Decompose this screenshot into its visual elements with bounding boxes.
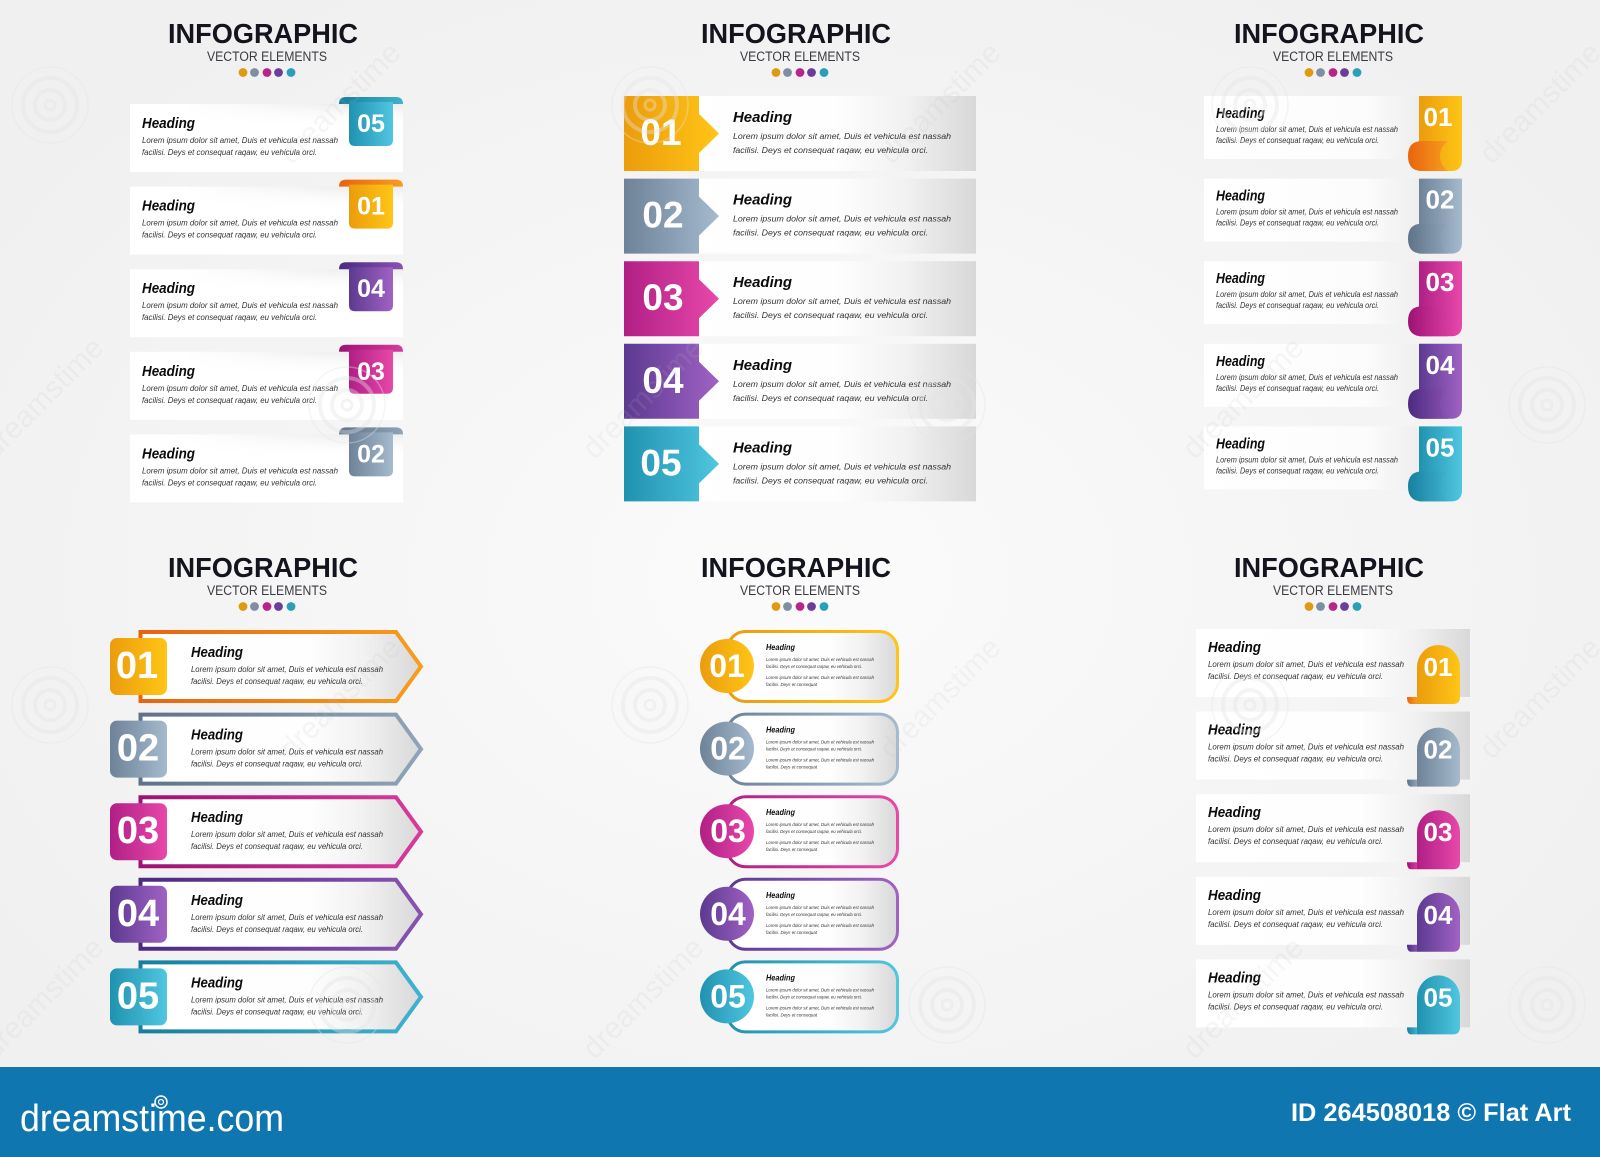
row: 01 [110, 632, 421, 701]
row: 05: facilisi. Deys et consequat raqaw, eu vehicula orci. [733, 476, 928, 485]
row: 02: 02 [710, 731, 746, 767]
row: 01: Lorem ipsum dolor sit amet, Duis et vehicula est nassah [766, 675, 874, 680]
footer banner [0, 1067, 1600, 1157]
row: 04: facilisi. Deys et consequat raqaw, eu vehicula orci. [733, 394, 928, 403]
row: 04: Heading [1208, 887, 1261, 904]
row: 02: Lorem ipsum dolor sit amet, Duis et vehicula est nassah [766, 740, 874, 745]
row: 05: Lorem ipsum dolor sit amet, Duis et vehicula est nassah [1216, 455, 1399, 464]
row: 02: Heading [142, 445, 195, 462]
row: 04: Lorem ipsum dolor sit amet, Duis et vehicula est nassah [1208, 908, 1405, 917]
row: 04: facilisi. Deys et consequat raqaw, eu vehicula orci. [191, 925, 363, 934]
row: 04: Lorem ipsum dolor sit amet, Duis et vehicula est nassah [1216, 373, 1399, 382]
row: 05: Lorem ipsum dolor sit amet, Duis et vehicula est nassah [733, 462, 952, 471]
row: 05: facilisi. Deys et consequat raqaw, eu vehicula orci. [1216, 466, 1379, 475]
row: 04: 04 [117, 893, 159, 935]
row: 03: 03 [357, 358, 385, 386]
heading: panel 5 title: INFOGRAPHIC [701, 552, 891, 583]
row: 05: 05 [357, 110, 385, 138]
row: 04: Heading [191, 892, 243, 909]
row: 03: Lorem ipsum dolor sit amet, Duis et vehicula est nassah [766, 822, 874, 827]
row: 03: facilisi. Deys et consequat raqaw, eu vehicula orci. [142, 396, 317, 405]
row: 04: Lorem ipsum dolor sit amet, Duis et vehicula est nassah [766, 905, 874, 910]
row: 01: facilisi. Deys et consequat [766, 682, 818, 687]
image id credit: ID 264508018 © Flat Art [1291, 1099, 1572, 1127]
text: dreamstime [273, 36, 407, 170]
panel: rounded tab list [1196, 552, 1470, 1034]
row: 01: 01 [1424, 652, 1452, 682]
row: 05 [624, 426, 976, 501]
row: 05: 05 [1424, 982, 1452, 1012]
row: 04 [1196, 877, 1470, 952]
text: dreamstime [273, 631, 407, 765]
row: 02 [1204, 179, 1462, 254]
row: 01: 01 [709, 648, 745, 684]
row: 05 [110, 962, 421, 1031]
row: 04: facilisi. Deys et consequat [766, 930, 818, 935]
row: 05: Heading [733, 439, 792, 456]
row: 01: 01 [640, 112, 682, 153]
row: 02: Lorem ipsum dolor sit amet, Duis et vehicula est nassah [1208, 743, 1405, 752]
row: 03 [1196, 794, 1470, 869]
row: 04 [1204, 344, 1462, 419]
row: 04: Heading [1216, 353, 1265, 370]
heading: panel 2 title: INFOGRAPHIC [701, 18, 891, 49]
row: 02 [1196, 712, 1470, 787]
row: 05 [700, 962, 898, 1032]
row: 05: facilisi. Deys et consequat raqaw, eu vehicula orci. [191, 1007, 363, 1016]
text: dreamstime [873, 631, 1007, 765]
row: 01: facilisi. Deys et consequat raqaw, eu vehicula orci. [1216, 136, 1379, 145]
heading: panel 5 title [701, 552, 891, 611]
row: 03 [624, 261, 976, 336]
row: 01: Lorem ipsum dolor sit amet, Duis et vehicula est nassah [766, 657, 874, 662]
heading: panel 2 title [701, 18, 891, 77]
row: 01: Lorem ipsum dolor sit amet, Duis et vehicula est nassah [1208, 660, 1405, 669]
row: 05: Lorem ipsum dolor sit amet, Duis et vehicula est nassah [1208, 990, 1405, 999]
row: 04: facilisi. Deys et consequat raqaw, eu vehicula orci. [766, 912, 862, 917]
row: 04: Lorem ipsum dolor sit amet, Duis et vehicula est nassah [142, 301, 339, 310]
row: 01: facilisi. Deys et consequat raqaw, eu vehicula orci. [766, 664, 862, 669]
heading: panel 1 title [168, 18, 358, 77]
row: 02: Heading [766, 725, 796, 735]
row: 02: Heading [1208, 722, 1261, 739]
row: 05 [130, 97, 403, 172]
row: 01: 01 [1424, 102, 1452, 132]
row: 03 [1204, 261, 1462, 336]
row: 03: Lorem ipsum dolor sit amet, Duis et vehicula est nassah [1208, 825, 1405, 834]
row: 03: Lorem ipsum dolor sit amet, Duis et vehicula est nassah [733, 297, 952, 306]
row: 04: facilisi. Deys et consequat raqaw, eu vehicula orci. [142, 313, 317, 322]
text: dreamstime [576, 931, 710, 1065]
row: 01: facilisi. Deys et consequat raqaw, eu vehicula orci. [191, 677, 363, 686]
panel: curled tab list [1204, 18, 1462, 501]
row: 05: Lorem ipsum dolor sit amet, Duis et vehicula est nassah [766, 987, 874, 992]
panel: arrow block list [624, 18, 976, 501]
row: 02: facilisi. Deys et consequat raqaw, eu vehicula orci. [1216, 219, 1379, 228]
row: 04 [110, 880, 421, 949]
row: 03: Heading [1216, 270, 1265, 287]
row: 02: facilisi. Deys et consequat raqaw, eu vehicula orci. [766, 747, 862, 752]
row: 05: Lorem ipsum dolor sit amet, Duis et vehicula est nassah [191, 995, 384, 1004]
row: 03: facilisi. Deys et consequat raqaw, eu vehicula orci. [191, 842, 363, 851]
row: 01: Heading [142, 198, 195, 215]
heading: panel 6 title [1234, 552, 1424, 611]
row: 04: Heading [733, 357, 792, 374]
heading: panel 1 title: VECTOR ELEMENTS [207, 49, 327, 64]
row: 02: Lorem ipsum dolor sit amet, Duis et vehicula est nassah [142, 466, 339, 475]
row: 02: 02 [1424, 735, 1452, 765]
heading: panel 5 title: VECTOR ELEMENTS [740, 583, 860, 598]
row: 01: 01 [357, 193, 385, 221]
row: 03: facilisi. Deys et consequat raqaw, eu vehicula orci. [766, 829, 862, 834]
row: 03: 03 [1424, 817, 1452, 847]
heading: panel 6 title: INFOGRAPHIC [1234, 552, 1424, 583]
heading: panel 3 title: INFOGRAPHIC [1234, 18, 1424, 49]
row: 04: facilisi. Deys et consequat raqaw, eu vehicula orci. [1216, 384, 1379, 393]
row: 02: 02 [642, 195, 684, 236]
heading: panel 4 title: INFOGRAPHIC [168, 552, 358, 583]
row: 04 [130, 262, 403, 337]
row: 01: Heading [733, 109, 792, 126]
row: 01 [624, 96, 976, 171]
row: 02: Lorem ipsum dolor sit amet, Duis et vehicula est nassah [733, 215, 952, 224]
row: 01: Heading [191, 644, 243, 661]
heading: panel 2 title: VECTOR ELEMENTS [740, 49, 860, 64]
row: 04: Lorem ipsum dolor sit amet, Duis et vehicula est nassah [733, 380, 952, 389]
row: 03 [700, 797, 898, 867]
panel: outlined arrow list [110, 552, 421, 1031]
row: 02 [624, 179, 976, 254]
row: 04: Lorem ipsum dolor sit amet, Duis et vehicula est nassah [191, 913, 384, 922]
row: 03: Heading [1208, 804, 1261, 821]
row: 03: Heading [142, 363, 195, 380]
row: 01 [1204, 96, 1462, 171]
row: 05 [1196, 959, 1470, 1034]
text: dreamstime [873, 36, 1007, 170]
row: 01 [130, 180, 403, 255]
row: 05: Heading [766, 972, 796, 982]
row: 01: Lorem ipsum dolor sit amet, Duis et vehicula est nassah [1216, 125, 1399, 134]
row: 05: facilisi. Deys et consequat raqaw, eu vehicula orci. [142, 148, 317, 157]
row: 01 [700, 632, 898, 702]
row: 04 [700, 879, 898, 949]
row: 03: facilisi. Deys et consequat raqaw, eu vehicula orci. [733, 311, 928, 320]
row: 02: facilisi. Deys et consequat raqaw, eu vehicula orci. [1208, 755, 1383, 764]
row: 03: Heading [733, 274, 792, 291]
row: 05: 05 [710, 978, 746, 1014]
row: 03: Heading [191, 809, 243, 826]
row: 02: facilisi. Deys et consequat raqaw, eu vehicula orci. [191, 760, 363, 769]
row: 02 [110, 715, 421, 784]
row: 04: Heading [766, 890, 796, 900]
row: 02: facilisi. Deys et consequat raqaw, eu vehicula orci. [142, 478, 317, 487]
row: 03: 03 [117, 810, 159, 852]
text: dreamstime [1176, 331, 1310, 465]
icon: logo spiral [155, 1096, 167, 1108]
row: 05: 05 [117, 975, 159, 1017]
row: 01 [1196, 629, 1470, 704]
row: 03 [110, 797, 421, 866]
row: 02: 02 [117, 728, 159, 770]
heading: panel 6 title: VECTOR ELEMENTS [1273, 583, 1393, 598]
panel: ribbon tab list [130, 18, 403, 502]
heading: panel 4 title [168, 552, 358, 611]
row: 03: Lorem ipsum dolor sit amet, Duis et vehicula est nassah [766, 840, 874, 845]
row: 03: 03 [642, 277, 684, 318]
row: 04: 04 [1426, 350, 1455, 380]
text: dreamstime [576, 331, 710, 465]
heading: panel 3 title [1234, 18, 1424, 77]
row: 02: 02 [357, 440, 385, 468]
row: 02: facilisi. Deys et consequat raqaw, eu vehicula orci. [733, 229, 928, 238]
row: 02: facilisi. Deys et consequat [766, 765, 818, 770]
row: 05: 05 [1426, 432, 1454, 462]
row: 01: 01 [116, 645, 158, 687]
row: 02: 02 [1426, 185, 1454, 215]
row: 05: Heading [191, 974, 243, 991]
row: 03: Lorem ipsum dolor sit amet, Duis et vehicula est nassah [142, 384, 339, 393]
row: 02: Lorem ipsum dolor sit amet, Duis et vehicula est nassah [1216, 208, 1399, 217]
row: 03: facilisi. Deys et consequat [766, 847, 818, 852]
row: 02: Heading [191, 727, 243, 744]
row: 03: Heading [766, 807, 796, 817]
row: 04: 04 [642, 360, 684, 401]
row: 04: 04 [357, 275, 385, 303]
row: 04: Lorem ipsum dolor sit amet, Duis et vehicula est nassah [766, 923, 874, 928]
row: 02 [700, 714, 898, 784]
row: 03 [130, 345, 403, 420]
row: 02 [130, 427, 403, 502]
text: dreamstime [1176, 931, 1310, 1065]
row: 03: facilisi. Deys et consequat raqaw, eu vehicula orci. [1208, 837, 1383, 846]
row: 01: Lorem ipsum dolor sit amet, Duis et vehicula est nassah [733, 132, 952, 141]
row: 05: Lorem ipsum dolor sit amet, Duis et vehicula est nassah [766, 1005, 874, 1010]
row: 05: facilisi. Deys et consequat raqaw, eu vehicula orci. [1208, 1002, 1383, 1011]
row: 04: 04 [710, 896, 746, 932]
row: 01: Heading [766, 642, 796, 652]
row: 03: facilisi. Deys et consequat raqaw, eu vehicula orci. [1216, 301, 1379, 310]
row: 01: facilisi. Deys et consequat raqaw, eu vehicula orci. [142, 231, 317, 240]
row: 01: Heading [1216, 105, 1265, 122]
row: 05 [1204, 426, 1462, 501]
row: 04: facilisi. Deys et consequat raqaw, eu vehicula orci. [1208, 920, 1383, 929]
row: 02: Heading [733, 192, 792, 209]
row: 04: 04 [1424, 900, 1453, 930]
row: 05: facilisi. Deys et consequat raqaw, eu vehicula orci. [766, 994, 862, 999]
brand logo text: dreamstime.com [20, 1098, 284, 1140]
panel: circle badge rounded box list [700, 552, 898, 1032]
row: 01: facilisi. Deys et consequat raqaw, eu vehicula orci. [1208, 672, 1383, 681]
row: 01: facilisi. Deys et consequat raqaw, eu vehicula orci. [733, 146, 928, 155]
row: 05: Lorem ipsum dolor sit amet, Duis et vehicula est nassah [142, 136, 339, 145]
row: 01: Heading [1208, 639, 1261, 656]
row: 05: 05 [640, 442, 682, 483]
heading: panel 4 title: VECTOR ELEMENTS [207, 583, 327, 598]
row: 01: Lorem ipsum dolor sit amet, Duis et vehicula est nassah [191, 665, 384, 674]
row: 05: Heading [1216, 435, 1265, 452]
row: 05: facilisi. Deys et consequat [766, 1012, 818, 1017]
row: 05: Heading [1208, 969, 1261, 986]
row: 01: Lorem ipsum dolor sit amet, Duis et vehicula est nassah [142, 219, 339, 228]
row: 03: Lorem ipsum dolor sit amet, Duis et vehicula est nassah [1216, 290, 1399, 299]
row: 02: Heading [1216, 188, 1265, 205]
row: 03: 03 [1426, 267, 1454, 297]
row: 02: Lorem ipsum dolor sit amet, Duis et vehicula est nassah [191, 748, 384, 757]
row: 02: Lorem ipsum dolor sit amet, Duis et vehicula est nassah [766, 758, 874, 763]
row: 04: Heading [142, 280, 195, 297]
heading: panel 3 title: VECTOR ELEMENTS [1273, 49, 1393, 64]
row: 03: Lorem ipsum dolor sit amet, Duis et vehicula est nassah [191, 830, 384, 839]
row: 03: 03 [710, 813, 746, 849]
row: 04 [624, 344, 976, 419]
heading: panel 1 title: INFOGRAPHIC [168, 18, 358, 49]
row: 05: Heading [142, 115, 195, 132]
